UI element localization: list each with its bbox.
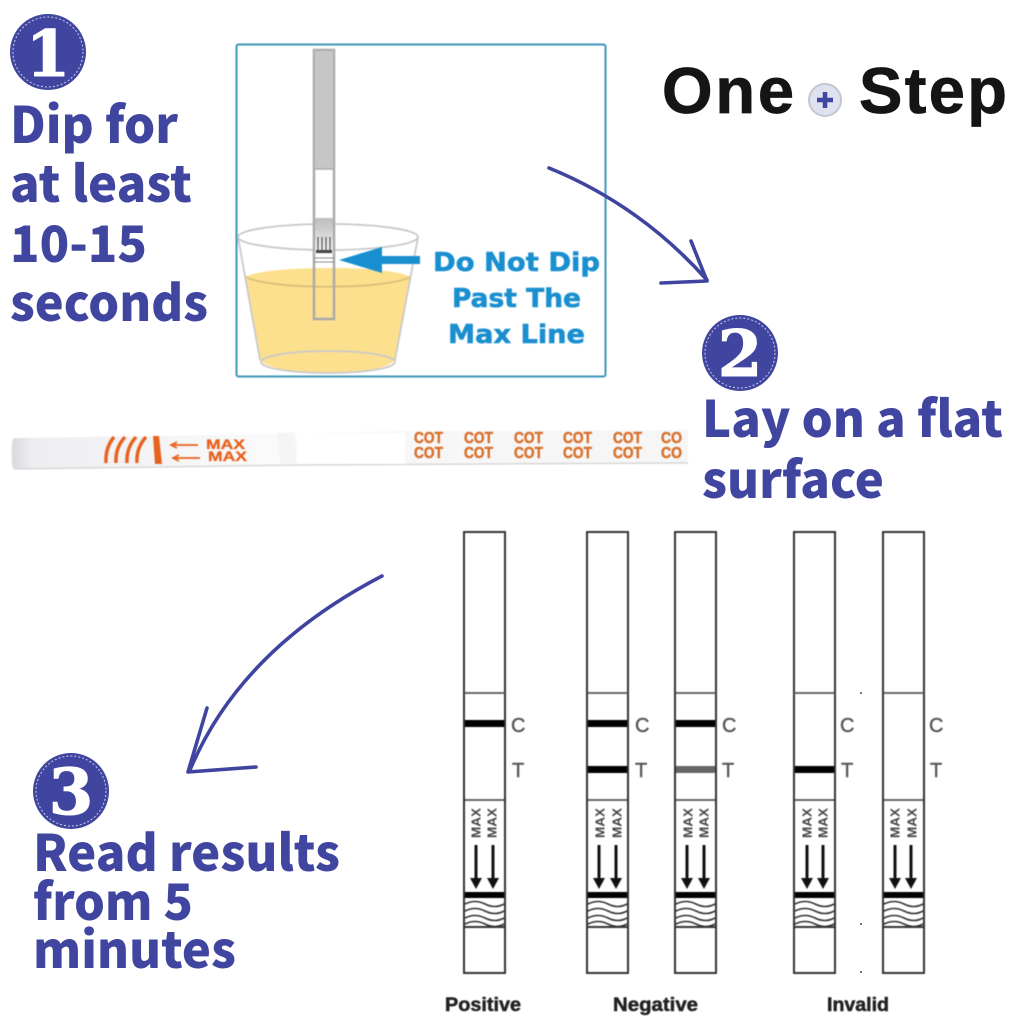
panel: dipping diagram <box>236 44 606 376</box>
COT labels: COT <box>514 430 543 447</box>
do not dip text: Max Line <box>448 320 585 350</box>
COT labels: COT <box>514 445 543 462</box>
result strip: negative, strong T line: MAX <box>592 808 608 838</box>
result strip: positive: MAX <box>484 808 500 838</box>
result strip: negative, faint T line: MAX <box>680 808 696 838</box>
step 2 badge <box>702 315 778 392</box>
COT labels: COT <box>563 430 592 447</box>
COT labels: CO <box>661 445 682 462</box>
COT labels: COT <box>613 430 642 447</box>
arrow to max line <box>339 247 420 273</box>
result strip: invalid, T line only <box>794 532 854 973</box>
arrow: step 2 to step 3 <box>188 576 382 772</box>
result strip: negative, strong T line <box>587 532 649 973</box>
step 3 badge: 3 <box>49 755 93 830</box>
logo: One Step: Step <box>859 54 1007 127</box>
max arrows <box>171 442 200 461</box>
step 2 heading: Lay on a flat <box>702 380 1003 452</box>
label: invalid: Invalid <box>827 995 889 1016</box>
logo: One Step: One <box>662 54 794 127</box>
result strip: invalid, T line only: MAX <box>800 808 814 838</box>
step 1 heading: at least <box>10 145 192 217</box>
result strip: positive: C <box>511 715 525 737</box>
step 3 heading: from 5 <box>33 863 193 935</box>
step 1 badge: 1 <box>26 17 70 92</box>
do not dip text: Do Not Dip <box>433 248 600 278</box>
result strip: positive <box>464 532 525 973</box>
step 3 heading: minutes <box>33 911 236 983</box>
liquid in cup <box>246 268 410 374</box>
step 2 badge: 2 <box>718 317 762 392</box>
cup outline <box>238 224 418 373</box>
result strip: positive: T <box>512 760 524 782</box>
arrow: step 1 to step 2 <box>549 168 707 283</box>
result strip: positive: MAX <box>468 808 484 838</box>
result strip: invalid, no lines <box>883 532 943 973</box>
photo of test strip: MAX <box>206 436 246 452</box>
step 1 heading: Dip for <box>10 86 179 158</box>
do not dip text <box>433 248 600 350</box>
COT labels: COT <box>563 445 592 462</box>
specks between invalid strips <box>860 693 862 972</box>
result strip: negative, faint T line <box>675 532 736 973</box>
label: negative: Negative <box>613 995 698 1016</box>
step 1 heading <box>10 86 208 336</box>
result strip: negative, strong T line: MAX <box>610 808 624 838</box>
result strip: invalid, no lines: MAX <box>888 808 902 838</box>
step 2 heading: surface <box>702 441 884 513</box>
result strip: invalid, no lines: C <box>929 715 943 737</box>
COT labels: COT <box>414 445 443 462</box>
result strip: invalid, no lines: T <box>930 760 942 782</box>
step 3 heading: Read results <box>33 814 340 886</box>
COT labels: COT <box>464 445 493 462</box>
result strip: negative, strong T line: T <box>635 760 647 782</box>
result strip: negative, faint T line: T <box>722 760 734 782</box>
logo: One Step <box>662 54 1007 127</box>
result strip: invalid, T line only: MAX <box>816 808 830 838</box>
COT labels: COT <box>414 430 443 447</box>
result strip: invalid, T line only: C <box>840 715 854 737</box>
photo of test strip: MAX <box>208 448 248 464</box>
label: positive: Positive <box>445 995 521 1016</box>
step 1 badge <box>10 14 86 92</box>
step 2 heading <box>702 380 1003 513</box>
result strip: invalid, no lines: MAX <box>904 808 920 838</box>
result strip: negative, strong T line: C <box>635 715 649 737</box>
step 3 badge <box>33 753 109 830</box>
COT labels <box>414 430 682 462</box>
result strip: negative, faint T line: C <box>722 715 736 737</box>
COT labels: CO <box>661 430 682 447</box>
COT labels: COT <box>464 430 493 447</box>
result strip: negative, faint T line: MAX <box>696 808 712 838</box>
COT labels: COT <box>613 445 642 462</box>
do not dip text: Past The <box>452 284 581 314</box>
photo of test strip <box>12 430 688 469</box>
step 1 heading: seconds <box>10 264 208 336</box>
step 1 heading: 10-15 <box>10 205 147 277</box>
orange stripes <box>106 437 146 463</box>
test strip in cup <box>314 50 334 319</box>
step 3 heading <box>33 814 340 983</box>
result strip: invalid, T line only: T <box>841 760 853 782</box>
